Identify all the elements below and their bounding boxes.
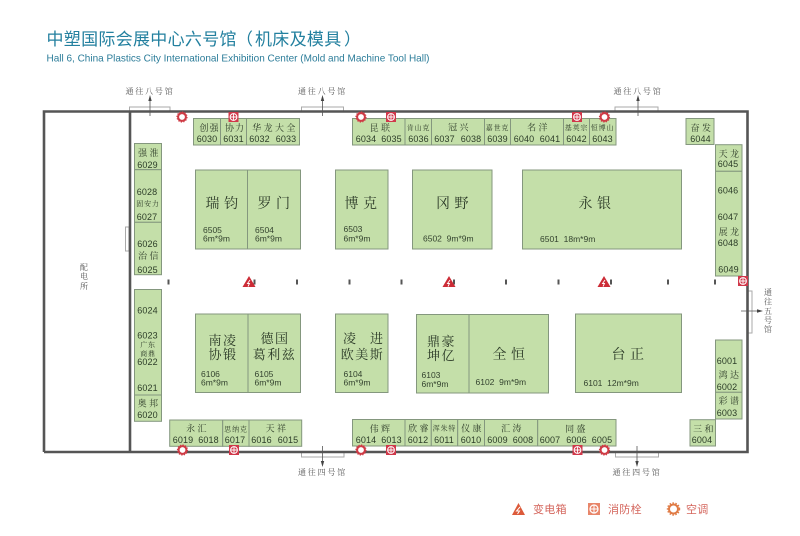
booth 6007 6006 6005: 6006 bbox=[566, 435, 587, 445]
booth 6029 bbox=[134, 144, 162, 170]
booth 6036: 6036 bbox=[408, 134, 429, 144]
booth 6019 6018 bbox=[170, 420, 223, 446]
booth 6019 6018: 永汇 bbox=[186, 422, 209, 434]
door: top right bbox=[615, 107, 658, 111]
booth 6046 to 6049: 6049 bbox=[718, 264, 739, 274]
booth 6504: 罗门 bbox=[258, 196, 294, 212]
title: 机床及模具 bbox=[255, 30, 342, 49]
booth 6505: 瑞钧 bbox=[206, 195, 242, 212]
icon: air conditioner top 3 bbox=[600, 112, 610, 122]
booth 6014 6013: 6014 bbox=[356, 435, 376, 445]
booth 6040 6041 bbox=[510, 118, 564, 145]
booth 6105: 葛利兹 bbox=[253, 347, 296, 362]
booth 6043: 6043 bbox=[592, 134, 613, 144]
label: to hall 4 left: 通往四号馆 bbox=[298, 467, 347, 477]
booth 6003 bbox=[716, 392, 742, 419]
title: ） bbox=[344, 30, 361, 49]
booth 6037 6038 bbox=[432, 118, 484, 145]
power room label: 电 bbox=[80, 271, 88, 281]
upper hall booths bbox=[196, 170, 682, 249]
booth 6040 6041: 名洋 bbox=[527, 122, 550, 132]
label: to hall 4 right: 通往四号馆 bbox=[612, 467, 662, 477]
booth 6504: 6m*9m bbox=[255, 234, 282, 244]
door: bottom left bbox=[302, 452, 344, 457]
icon: hydrant right bbox=[738, 276, 748, 286]
booth 6105: 6m*9m bbox=[254, 378, 281, 388]
icon: transformer 3 bbox=[598, 276, 610, 287]
icon: air conditioner bottom 1 bbox=[178, 445, 188, 455]
booth 6024 to 6021: 6021 bbox=[137, 383, 158, 393]
legend bbox=[512, 502, 709, 516]
booth 6016 6015: 天祥 bbox=[266, 422, 288, 434]
arrow: to hall 8 left bbox=[148, 95, 152, 116]
booth 6014 6013: 伟辉 bbox=[370, 423, 392, 434]
booth 6104: 6m*9m bbox=[344, 378, 370, 388]
booth 6034 6035 bbox=[352, 118, 405, 145]
booth 6012: 6012 bbox=[408, 435, 428, 445]
booth 6103: 6m*9m bbox=[422, 379, 448, 389]
booth 6106: 南凌 bbox=[208, 333, 238, 348]
booth 6040 6041: 6041 bbox=[540, 134, 560, 144]
booth 6101: 台正 bbox=[612, 347, 648, 363]
booth 6017: 6017 bbox=[225, 435, 245, 445]
icon: hydrant bottom 2 bbox=[386, 445, 396, 455]
icon: air conditioner top 1 bbox=[177, 112, 187, 122]
booth 6037 6038: 6037 bbox=[434, 134, 455, 144]
booth 6103: 6103 bbox=[422, 370, 441, 380]
booth 6024 to 6021: 6022 bbox=[137, 357, 158, 367]
booth 6045 bbox=[716, 145, 742, 171]
label: to hall 5: 往 bbox=[764, 296, 772, 306]
label: to hall 5: 号 bbox=[764, 315, 772, 325]
booth 6502: 冈野 bbox=[436, 196, 473, 212]
arrow: to hall 5 bbox=[741, 309, 763, 313]
legend: air conditioner: 空调 bbox=[686, 502, 709, 516]
booth 6009 6008: 6009 bbox=[487, 435, 508, 445]
booth 6042: 基英宗 bbox=[565, 123, 588, 132]
booth 6106: 协锻 bbox=[208, 347, 238, 362]
booth 6024 to 6021: 6024 bbox=[137, 306, 158, 316]
booth 6104: 凌进 bbox=[343, 331, 397, 346]
booth 6030 bbox=[194, 118, 220, 145]
arrow: to hall 8 middle bbox=[321, 95, 324, 116]
booth 6001 6002: 6002 bbox=[717, 382, 737, 392]
icon: air conditioner bottom 3 bbox=[600, 445, 610, 455]
arrow: to hall 4 right bbox=[635, 446, 639, 467]
title: 中塑国际会展中心六号馆 bbox=[46, 30, 237, 49]
booth 6024 to 6021: 广东 bbox=[140, 340, 156, 349]
booth 6032 6033: 华龙大全 bbox=[252, 122, 298, 133]
booth 6104: 6104 bbox=[344, 369, 363, 379]
booth 6007 6006 6005: 6005 bbox=[592, 435, 612, 445]
booth 6029: 强淮 bbox=[138, 147, 161, 158]
booth 6046 to 6049: 6046 bbox=[718, 186, 738, 196]
booth 6103 bbox=[416, 314, 469, 393]
booth 6024 to 6021 bbox=[134, 290, 162, 395]
legend: transformer bbox=[512, 502, 567, 516]
arrow: to hall 8 right bbox=[636, 95, 640, 116]
booth 6026 6025: 6025 bbox=[137, 265, 158, 275]
booth 6003: 6003 bbox=[717, 408, 737, 418]
icon: hydrant bottom 3 bbox=[572, 445, 582, 455]
booth 6044 bbox=[686, 118, 714, 144]
booth 6032 6033: 6033 bbox=[276, 134, 296, 144]
booth 6009 6008 bbox=[484, 420, 538, 446]
booth 6501: 永银 bbox=[578, 196, 616, 212]
booth 6039: 6039 bbox=[487, 134, 508, 144]
booth 6503: 6m*9m bbox=[344, 234, 370, 244]
booth 6009 6008: 6008 bbox=[513, 435, 533, 445]
icon: hydrant bottom 1 bbox=[229, 445, 239, 455]
booth 6011 bbox=[431, 420, 458, 446]
booth 6028 6027: 6028 bbox=[137, 187, 157, 197]
booth 6030: 创强 bbox=[199, 122, 220, 133]
booth 6024 to 6021: 商鼎 bbox=[140, 349, 156, 358]
booth 6012 bbox=[405, 420, 431, 446]
booth 6026 6025: 6026 bbox=[137, 239, 158, 249]
booth 6046 to 6049: 6047 bbox=[718, 212, 738, 222]
booth 6505: 6505 bbox=[203, 225, 222, 235]
legend: air conditioner bbox=[668, 502, 709, 516]
icon: air conditioner bottom 2 bbox=[356, 445, 366, 455]
booth 6016 6015 bbox=[249, 420, 302, 446]
right booths bbox=[690, 145, 742, 446]
booth 6020: 奥邦 bbox=[138, 398, 160, 408]
legend: hydrant bbox=[588, 502, 642, 516]
booth 6104: 欧美斯 bbox=[341, 347, 384, 362]
booth 6007 6006 6005: 6007 bbox=[540, 435, 560, 445]
booth 6044: 6044 bbox=[690, 134, 711, 144]
legend: hydrant: 消防栓 bbox=[608, 502, 642, 516]
booth 6104 bbox=[336, 314, 397, 392]
booth 6017: 思纳克 bbox=[224, 424, 248, 434]
booth 6032 6033 bbox=[246, 118, 300, 145]
booth 6042 bbox=[564, 118, 590, 145]
booth 6102 bbox=[469, 314, 548, 393]
booth 6020: 6020 bbox=[137, 410, 158, 420]
booth 6503: 博克 bbox=[344, 195, 382, 212]
booth 6031: 6031 bbox=[223, 134, 244, 144]
icon: air conditioner top 2 bbox=[356, 112, 366, 122]
booth 6004: 三和 bbox=[693, 424, 716, 434]
power room label bbox=[80, 263, 88, 291]
booth 6010: 6010 bbox=[461, 435, 481, 445]
door: left bbox=[126, 227, 129, 251]
booth 6502 bbox=[412, 170, 492, 249]
booth 6106 bbox=[196, 314, 248, 392]
power room label: 所 bbox=[80, 281, 88, 291]
label: to hall 8 left: 通往八号馆 bbox=[126, 86, 174, 96]
booth 6505: 6m*9m bbox=[203, 234, 230, 244]
door: right bbox=[748, 291, 752, 333]
booth 6503 bbox=[336, 170, 388, 249]
columns row bbox=[168, 280, 716, 284]
booth 6028 6027: 固安力 bbox=[136, 199, 160, 208]
booth 6007 6006 6005: 同盛 bbox=[565, 423, 588, 434]
label: to hall 8 middle: 通往八号馆 bbox=[298, 86, 347, 96]
label: to hall 5: 馆 bbox=[764, 324, 772, 334]
booth 6030: 6030 bbox=[197, 134, 217, 144]
booth 6036: 肯山克 bbox=[407, 123, 430, 132]
booth 6029: 6029 bbox=[137, 160, 158, 170]
booth 6026 6025 bbox=[134, 222, 162, 275]
booth 6024 to 6021: 6023 bbox=[137, 330, 158, 340]
label: to hall 5: 五 bbox=[764, 307, 772, 316]
booth 6503: 6503 bbox=[344, 224, 363, 234]
hall walls bbox=[44, 112, 748, 452]
booth 6105: 6105 bbox=[254, 369, 274, 379]
booth 6042: 6042 bbox=[566, 134, 587, 144]
booth 6016 6015: 6016 bbox=[251, 435, 272, 445]
booth 6039 bbox=[484, 118, 510, 145]
booth 6031 bbox=[220, 118, 246, 145]
booth 6020 bbox=[134, 395, 162, 421]
title: （ bbox=[236, 30, 253, 49]
booth 6017 bbox=[223, 420, 249, 446]
door: bottom right bbox=[616, 452, 658, 457]
icon: hydrant top 2 bbox=[386, 112, 396, 122]
booth 6011: 6011 bbox=[434, 435, 454, 445]
booth 6032 6033: 6032 bbox=[249, 134, 270, 144]
booth 6014 6013: 6013 bbox=[381, 435, 402, 445]
booth 6028 6027: 6027 bbox=[137, 212, 157, 222]
booth 6031: 协力 bbox=[225, 122, 245, 133]
booth 6102: 6102 9m*9m bbox=[476, 377, 526, 387]
booth 6105: 德国 bbox=[260, 331, 290, 346]
booth 6010: 仪康 bbox=[461, 422, 484, 434]
legend: transformer: 变电箱 bbox=[533, 502, 567, 516]
booth 6101: 6101 12m*9m bbox=[584, 378, 639, 388]
label: to hall 8 right: 通往八号馆 bbox=[614, 86, 662, 96]
booth 6036 bbox=[405, 118, 432, 145]
left booths bbox=[134, 144, 162, 421]
booth 6046 to 6049 bbox=[716, 171, 742, 276]
booth 6504 bbox=[248, 170, 300, 249]
booth 6001 6002: 6001 bbox=[717, 356, 737, 366]
booth 6045: 天龙 bbox=[719, 148, 741, 159]
booth 6001 6002: 鸿达 bbox=[719, 369, 741, 380]
booth 6019 6018: 6018 bbox=[198, 435, 219, 445]
booth 6039: 嘉世克 bbox=[486, 123, 509, 132]
booth 6103: 坤亿 bbox=[427, 348, 456, 363]
label: to hall 5 bbox=[764, 287, 772, 334]
booth 6010 bbox=[458, 420, 484, 446]
power room label: 配 bbox=[80, 263, 88, 272]
booth 6007 6006 6005 bbox=[538, 420, 616, 446]
booth 6026 6025: 治信 bbox=[138, 250, 161, 261]
subtitle: Hall 6, China Plastics City International Exhibition Center (Mold and Machine Tool Hall) bbox=[46, 52, 430, 64]
booth 6043: 恒博山 bbox=[591, 123, 614, 132]
booth 6014 6013 bbox=[352, 420, 405, 446]
booth 6004 bbox=[690, 420, 716, 446]
door: top left bbox=[130, 107, 170, 111]
booth 6046 to 6049: 6048 bbox=[718, 238, 738, 248]
booth 6012: 欣睿 bbox=[408, 422, 431, 434]
booth 6043 bbox=[590, 118, 616, 145]
booth 6009 6008: 汇涛 bbox=[501, 422, 524, 434]
booth 6046 to 6049: 展龙 bbox=[719, 226, 741, 237]
icon: transformer 1 bbox=[242, 276, 256, 287]
booth 6019 6018: 6019 bbox=[173, 435, 193, 445]
booth 6502: 6502 9m*9m bbox=[423, 234, 474, 244]
booth 6501: 6501 18m*9m bbox=[540, 234, 595, 244]
booth 6044: 奋发 bbox=[691, 122, 713, 133]
booth 6504: 6504 bbox=[255, 225, 274, 235]
booth 6011: 浑朱特 bbox=[433, 424, 456, 432]
booth 6037 6038: 冠兴 bbox=[448, 122, 471, 132]
booth 6034 6035: 6035 bbox=[381, 134, 402, 144]
booth 6016 6015: 6015 bbox=[278, 435, 298, 445]
booth 6505 bbox=[196, 170, 248, 249]
label: to hall 5: 通 bbox=[764, 287, 772, 297]
booth 6106: 6m*9m bbox=[201, 378, 228, 388]
top booths bbox=[194, 118, 714, 145]
booth 6034 6035: 昆联 bbox=[370, 122, 392, 133]
booth 6105 bbox=[248, 314, 300, 392]
booth 6106: 6106 bbox=[201, 369, 220, 379]
booth 6037 6038: 6038 bbox=[461, 134, 481, 144]
booth 6028 6027 bbox=[134, 170, 162, 222]
booth 6003: 彩谱 bbox=[719, 395, 741, 406]
booth 6101 bbox=[576, 314, 682, 392]
booth 6001 6002 bbox=[716, 340, 742, 392]
icon: hydrant top 1 bbox=[228, 112, 238, 122]
booth 6501 bbox=[522, 170, 682, 249]
booth 6102: 全恒 bbox=[492, 346, 530, 363]
booth 6040 6041: 6040 bbox=[514, 134, 534, 144]
arrow: to hall 4 left bbox=[321, 446, 324, 467]
icon: transformer 2 bbox=[442, 276, 456, 287]
lower hall booths bbox=[196, 314, 682, 393]
bottom booths bbox=[170, 420, 616, 446]
booth 6004: 6004 bbox=[692, 435, 712, 445]
booth 6034 6035: 6034 bbox=[356, 134, 376, 144]
booth 6103: 鼎豪 bbox=[427, 334, 456, 349]
booth 6045: 6045 bbox=[718, 159, 738, 169]
icon: hydrant top 3 bbox=[572, 112, 582, 122]
door: top middle bbox=[302, 107, 344, 111]
